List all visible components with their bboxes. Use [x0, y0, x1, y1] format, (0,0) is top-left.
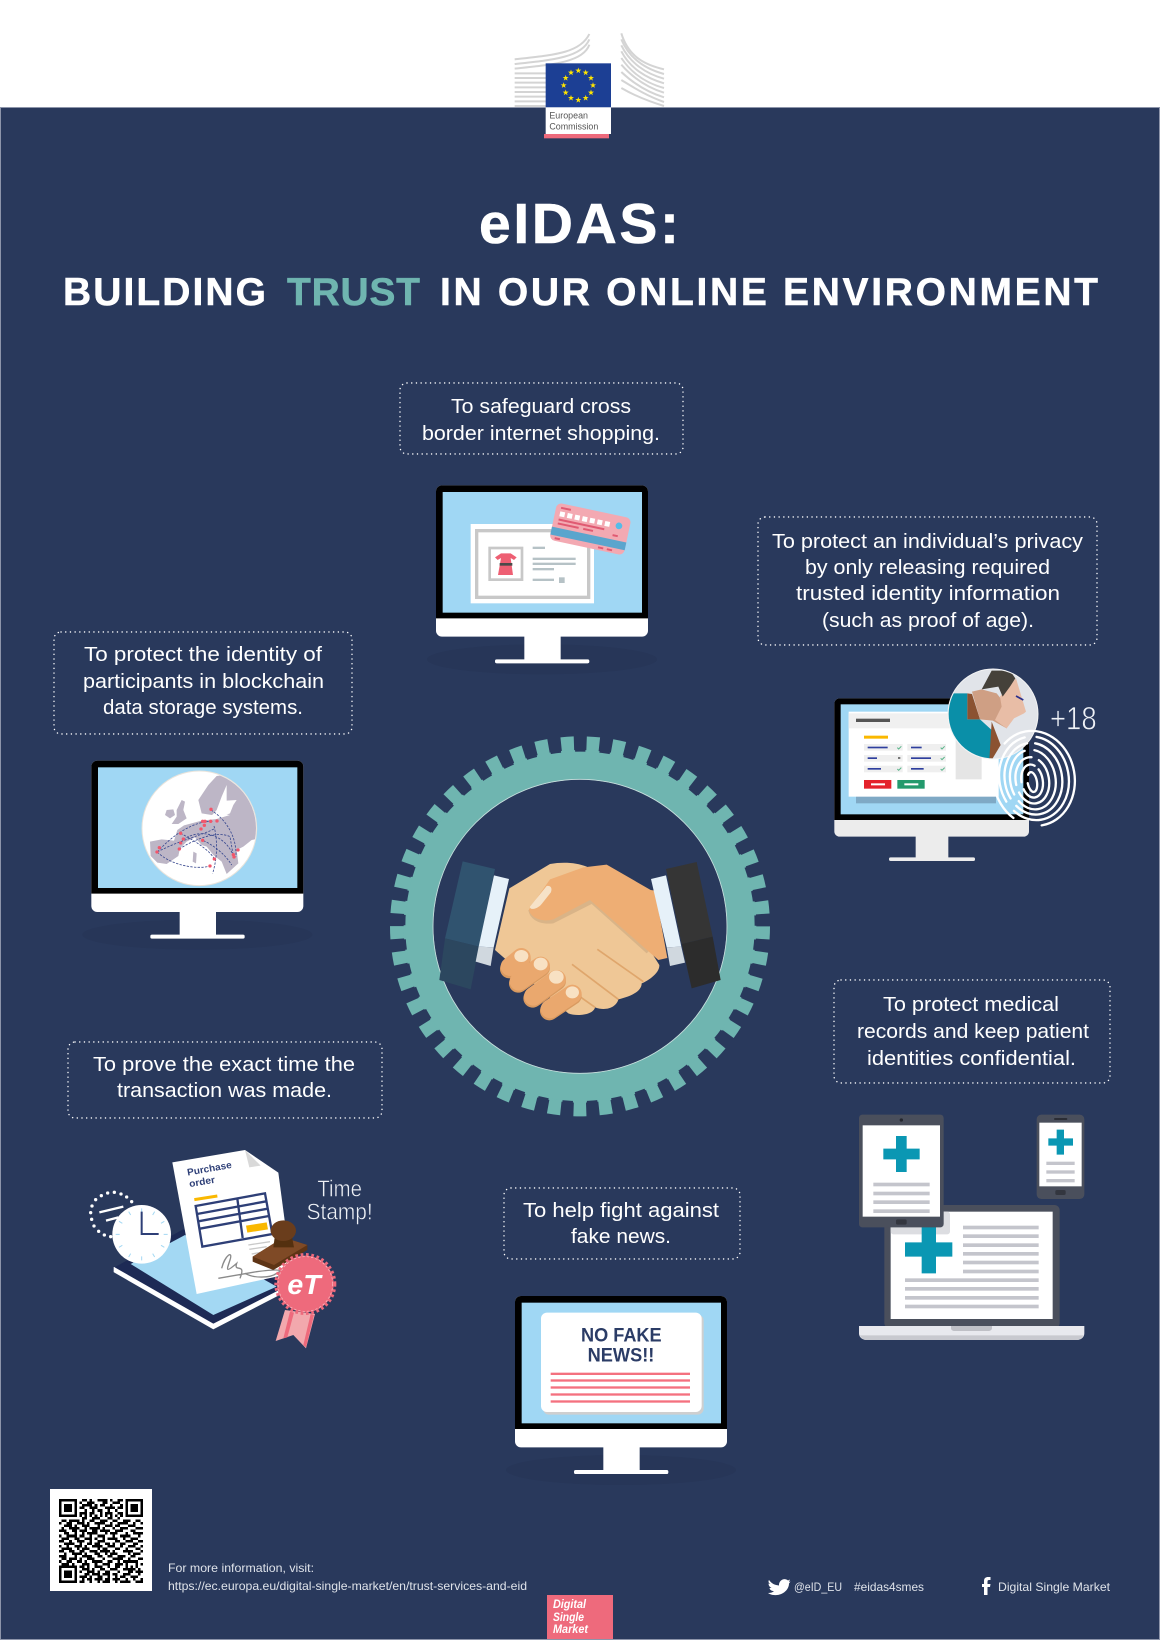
- purchase order document: Purchase: [186, 1160, 233, 1179]
- callout: fake news: [504, 1188, 740, 1259]
- callout: time stamp: transaction was made.: [117, 1079, 332, 1102]
- central gear with handshake: [398, 744, 762, 1108]
- callout: medical: [834, 980, 1110, 1083]
- purchase order document: [172, 1150, 292, 1294]
- callout: privacy: trusted identity information: [796, 582, 1060, 605]
- footer: more information: [168, 1561, 527, 1593]
- footer: more information: For more information, visit:: [168, 1561, 314, 1575]
- badge: Digital Single Market: [547, 1595, 613, 1639]
- light hand: [495, 863, 659, 1015]
- map land: [150, 770, 260, 874]
- tablet: [114, 1230, 287, 1329]
- Time Stamp label: Stamp!: [307, 1198, 373, 1224]
- dark hand: [529, 865, 667, 960]
- callout: shopping: border internet shopping.: [422, 422, 660, 445]
- Time Stamp label: Time: [317, 1176, 362, 1202]
- stamp: [253, 1220, 307, 1270]
- head portrait: [947, 669, 1038, 760]
- cuffs: [479, 875, 509, 947]
- icon: monitor with online shop: [427, 485, 657, 674]
- footer: more information: https://ec.europa.eu/digital-single-market/en/trust-services-and-eid: [168, 1579, 527, 1593]
- fingerprint: [986, 724, 1082, 832]
- icon: facebook f: [982, 1577, 990, 1595]
- callout: time stamp: To prove the exact time the: [93, 1053, 355, 1076]
- social: twitter: [768, 1579, 924, 1595]
- purchase order document: order: [188, 1175, 216, 1190]
- callout: medical: records and keep patient: [857, 1020, 1089, 1043]
- callout: fake news: To help fight against: [523, 1199, 719, 1222]
- callout: time stamp: [68, 1042, 382, 1118]
- social: facebook: [982, 1577, 1111, 1595]
- Time Stamp label: [307, 1176, 373, 1224]
- callout: blockchain: participants in blockchain: [83, 670, 324, 693]
- callout: fake news: fake news.: [571, 1225, 671, 1248]
- form rows: [864, 744, 946, 772]
- tablet: [859, 1115, 944, 1227]
- badge eT: [276, 1255, 335, 1348]
- icon: privacy form, head and fingerprint: [834, 669, 1097, 861]
- icon: monitor with no fake news: NO FAKE: [581, 1326, 662, 1347]
- logo wordmark: European: [549, 110, 588, 120]
- logo: European Commission: [515, 33, 664, 138]
- dress: [495, 553, 517, 575]
- callout: shopping: [400, 383, 683, 454]
- icon: monitor with no fake news: NEWS!!: [588, 1346, 654, 1367]
- laptop: [859, 1205, 1084, 1340]
- logo building: [515, 33, 664, 106]
- badge eT: eT: [287, 1269, 324, 1300]
- badge: Digital Single Market: Market: [553, 1622, 589, 1636]
- callout: medical: To protect medical: [883, 993, 1059, 1016]
- map points: [155, 808, 240, 868]
- phone: [1037, 1115, 1084, 1199]
- left sleeve: [445, 861, 495, 947]
- icon: monitor with europe map: [91, 760, 304, 939]
- handshake: [439, 861, 721, 1015]
- callout: medical: identities confidential.: [867, 1047, 1076, 1070]
- palm creases: [572, 949, 643, 1007]
- callout: blockchain: To protect the identity of: [84, 643, 322, 666]
- icon: time stamped purchase order: [89, 1150, 373, 1348]
- callout: blockchain: [54, 632, 352, 734]
- callout: privacy: by only releasing required: [805, 556, 1050, 579]
- logo wordmark: [549, 110, 598, 131]
- callout: blockchain: data storage systems.: [103, 696, 303, 719]
- +18 label: +18: [1050, 700, 1097, 736]
- subtitle: TRUST: [287, 271, 420, 314]
- title: eIDAS:: [479, 192, 679, 256]
- badge: Digital Single Market: Digital: [553, 1597, 587, 1611]
- credit card: [549, 503, 631, 555]
- logo wordmark: Commission: [549, 121, 598, 131]
- social: twitter: @eID_EU: [794, 1580, 842, 1594]
- fingers: [509, 957, 572, 1011]
- badge: Digital Single Market: Single: [553, 1610, 584, 1624]
- map routes: [157, 810, 236, 873]
- subtitle: [63, 271, 1098, 314]
- baltic sea: [212, 785, 236, 815]
- thumb shadow: [528, 898, 650, 953]
- callout: privacy: (such as proof of age).: [822, 609, 1034, 632]
- subtitle: BUILDING: [63, 271, 266, 314]
- social: twitter: #eidas4smes: [854, 1580, 924, 1594]
- QR code: [50, 1489, 152, 1591]
- gear: [398, 744, 762, 1108]
- icon: monitor with no fake news: [506, 1296, 736, 1485]
- clock: [89, 1191, 171, 1264]
- callout: privacy: To protect an individual’s privacy: [772, 530, 1084, 553]
- social: facebook: Digital Single Market: [998, 1580, 1111, 1594]
- right sleeve: [666, 862, 713, 944]
- subtitle: IN OUR ONLINE ENVIRONMENT: [440, 271, 1098, 314]
- logo stars: [561, 67, 596, 103]
- callout: privacy: [758, 517, 1097, 645]
- icon: medical devices: [859, 1115, 1084, 1340]
- icon: twitter bird: [768, 1579, 790, 1595]
- callout: shopping: To safeguard cross: [451, 395, 631, 418]
